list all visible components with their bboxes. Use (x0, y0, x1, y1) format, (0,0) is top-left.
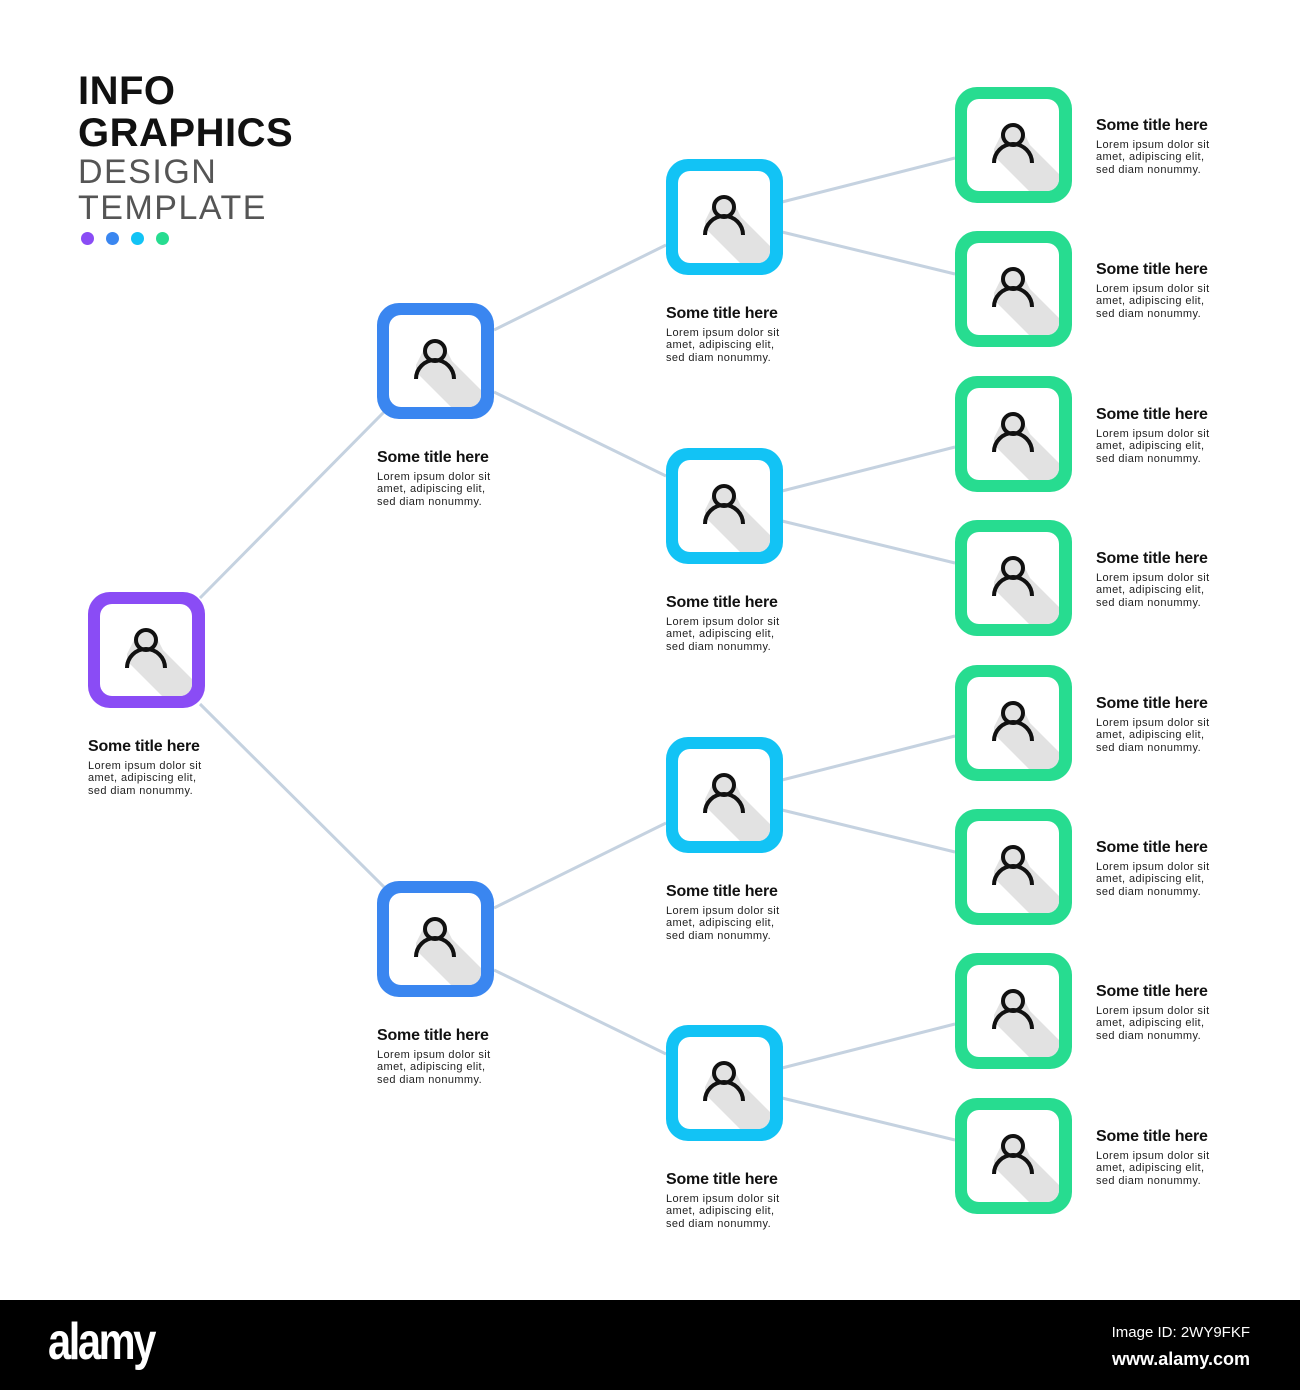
tree diagram (88, 87, 1072, 1214)
text: sed diam nonummy. (666, 1218, 771, 1230)
text: sed diam nonummy. (1096, 453, 1201, 465)
text: Some title here (666, 883, 778, 900)
text: root: sed diam nonummy. (88, 785, 193, 797)
text: Lorem ipsum dolor sit (666, 616, 780, 628)
text: sed diam nonummy. (1096, 597, 1201, 609)
title: DESIGN (78, 153, 217, 191)
connector lines (200, 158, 955, 1140)
title (78, 69, 293, 245)
logo: alamy (48, 1313, 154, 1371)
image id (1112, 1324, 1250, 1369)
text: amet, adipiscing elit, (666, 917, 774, 929)
text: sed diam nonummy. (666, 641, 771, 653)
color dots (81, 232, 169, 245)
text: amet, adipiscing elit, (1096, 584, 1204, 596)
text: Some title here (666, 594, 778, 611)
text: Some title here (1096, 695, 1208, 712)
text: amet, adipiscing elit, (377, 1061, 485, 1073)
title: GRAPHICS (78, 111, 293, 155)
node: level3 (666, 159, 786, 279)
footer bar (0, 1300, 1300, 1390)
text: amet, adipiscing elit, (1096, 295, 1204, 307)
text: Some title here (1096, 839, 1208, 856)
text: amet, adipiscing elit, (1096, 873, 1204, 885)
text: Some title here (1096, 550, 1208, 567)
text: amet, adipiscing elit, (1096, 729, 1204, 741)
text: Some title here (377, 1027, 489, 1044)
title: INFO (78, 69, 176, 113)
text: level2: sed diam nonummy. (377, 496, 482, 508)
text: level3: amet, adipiscing elit, (666, 339, 774, 351)
text: level4: sed diam nonummy. (1096, 164, 1201, 176)
text: Lorem ipsum dolor sit (1096, 283, 1210, 295)
text: sed diam nonummy. (666, 930, 771, 942)
text: Lorem ipsum dolor sit (1096, 572, 1210, 584)
node: level4 (955, 87, 1075, 207)
text: root (88, 738, 202, 797)
text: amet, adipiscing elit, (666, 1205, 774, 1217)
text: Lorem ipsum dolor sit (1096, 1150, 1210, 1162)
text: sed diam nonummy. (1096, 1175, 1201, 1187)
text: level3: sed diam nonummy. (666, 352, 771, 364)
text: sed diam nonummy. (1096, 308, 1201, 320)
node: root purple (88, 592, 208, 712)
text: root: Lorem ipsum dolor sit (88, 760, 202, 772)
node: level2 top (377, 303, 497, 423)
text: level3: Lorem ipsum dolor sit (666, 327, 780, 339)
text: Lorem ipsum dolor sit (377, 1049, 491, 1061)
text: level4: Some title here (1096, 117, 1208, 134)
text: sed diam nonummy. (1096, 1030, 1201, 1042)
text: Lorem ipsum dolor sit (666, 1193, 780, 1205)
text: root: amet, adipiscing elit, (88, 772, 196, 784)
text: Some title here (1096, 406, 1208, 423)
text: level4 (1096, 117, 1210, 176)
text: root: Some title here (88, 738, 200, 755)
text: level2: Some title here (377, 449, 489, 466)
text: level3 (666, 305, 780, 364)
text: Some title here (1096, 983, 1208, 1000)
text: Some title here (666, 1171, 778, 1188)
text: amet, adipiscing elit, (1096, 1017, 1204, 1029)
text: level4: amet, adipiscing elit, (1096, 151, 1204, 163)
text: Lorem ipsum dolor sit (1096, 861, 1210, 873)
text: Some title here (1096, 261, 1208, 278)
image id: Image ID: 2WY9FKF (1112, 1324, 1250, 1341)
text: Lorem ipsum dolor sit (1096, 717, 1210, 729)
image id: www.alamy.com (1112, 1349, 1250, 1369)
text: level3: Some title here (666, 305, 778, 322)
text: sed diam nonummy. (1096, 742, 1201, 754)
text: amet, adipiscing elit, (1096, 1162, 1204, 1174)
text: level2: amet, adipiscing elit, (377, 483, 485, 495)
text: Lorem ipsum dolor sit (666, 905, 780, 917)
text: level2 (377, 449, 491, 508)
text: amet, adipiscing elit, (666, 628, 774, 640)
text: level2: Lorem ipsum dolor sit (377, 471, 491, 483)
text: level4: Lorem ipsum dolor sit (1096, 139, 1210, 151)
text: Lorem ipsum dolor sit (1096, 428, 1210, 440)
text: amet, adipiscing elit, (1096, 440, 1204, 452)
text: sed diam nonummy. (377, 1074, 482, 1086)
text: Lorem ipsum dolor sit (1096, 1005, 1210, 1017)
node: level2 bottom (377, 881, 497, 1001)
text: sed diam nonummy. (1096, 886, 1201, 898)
text: Some title here (1096, 1128, 1208, 1145)
title: TEMPLATE (78, 189, 267, 227)
